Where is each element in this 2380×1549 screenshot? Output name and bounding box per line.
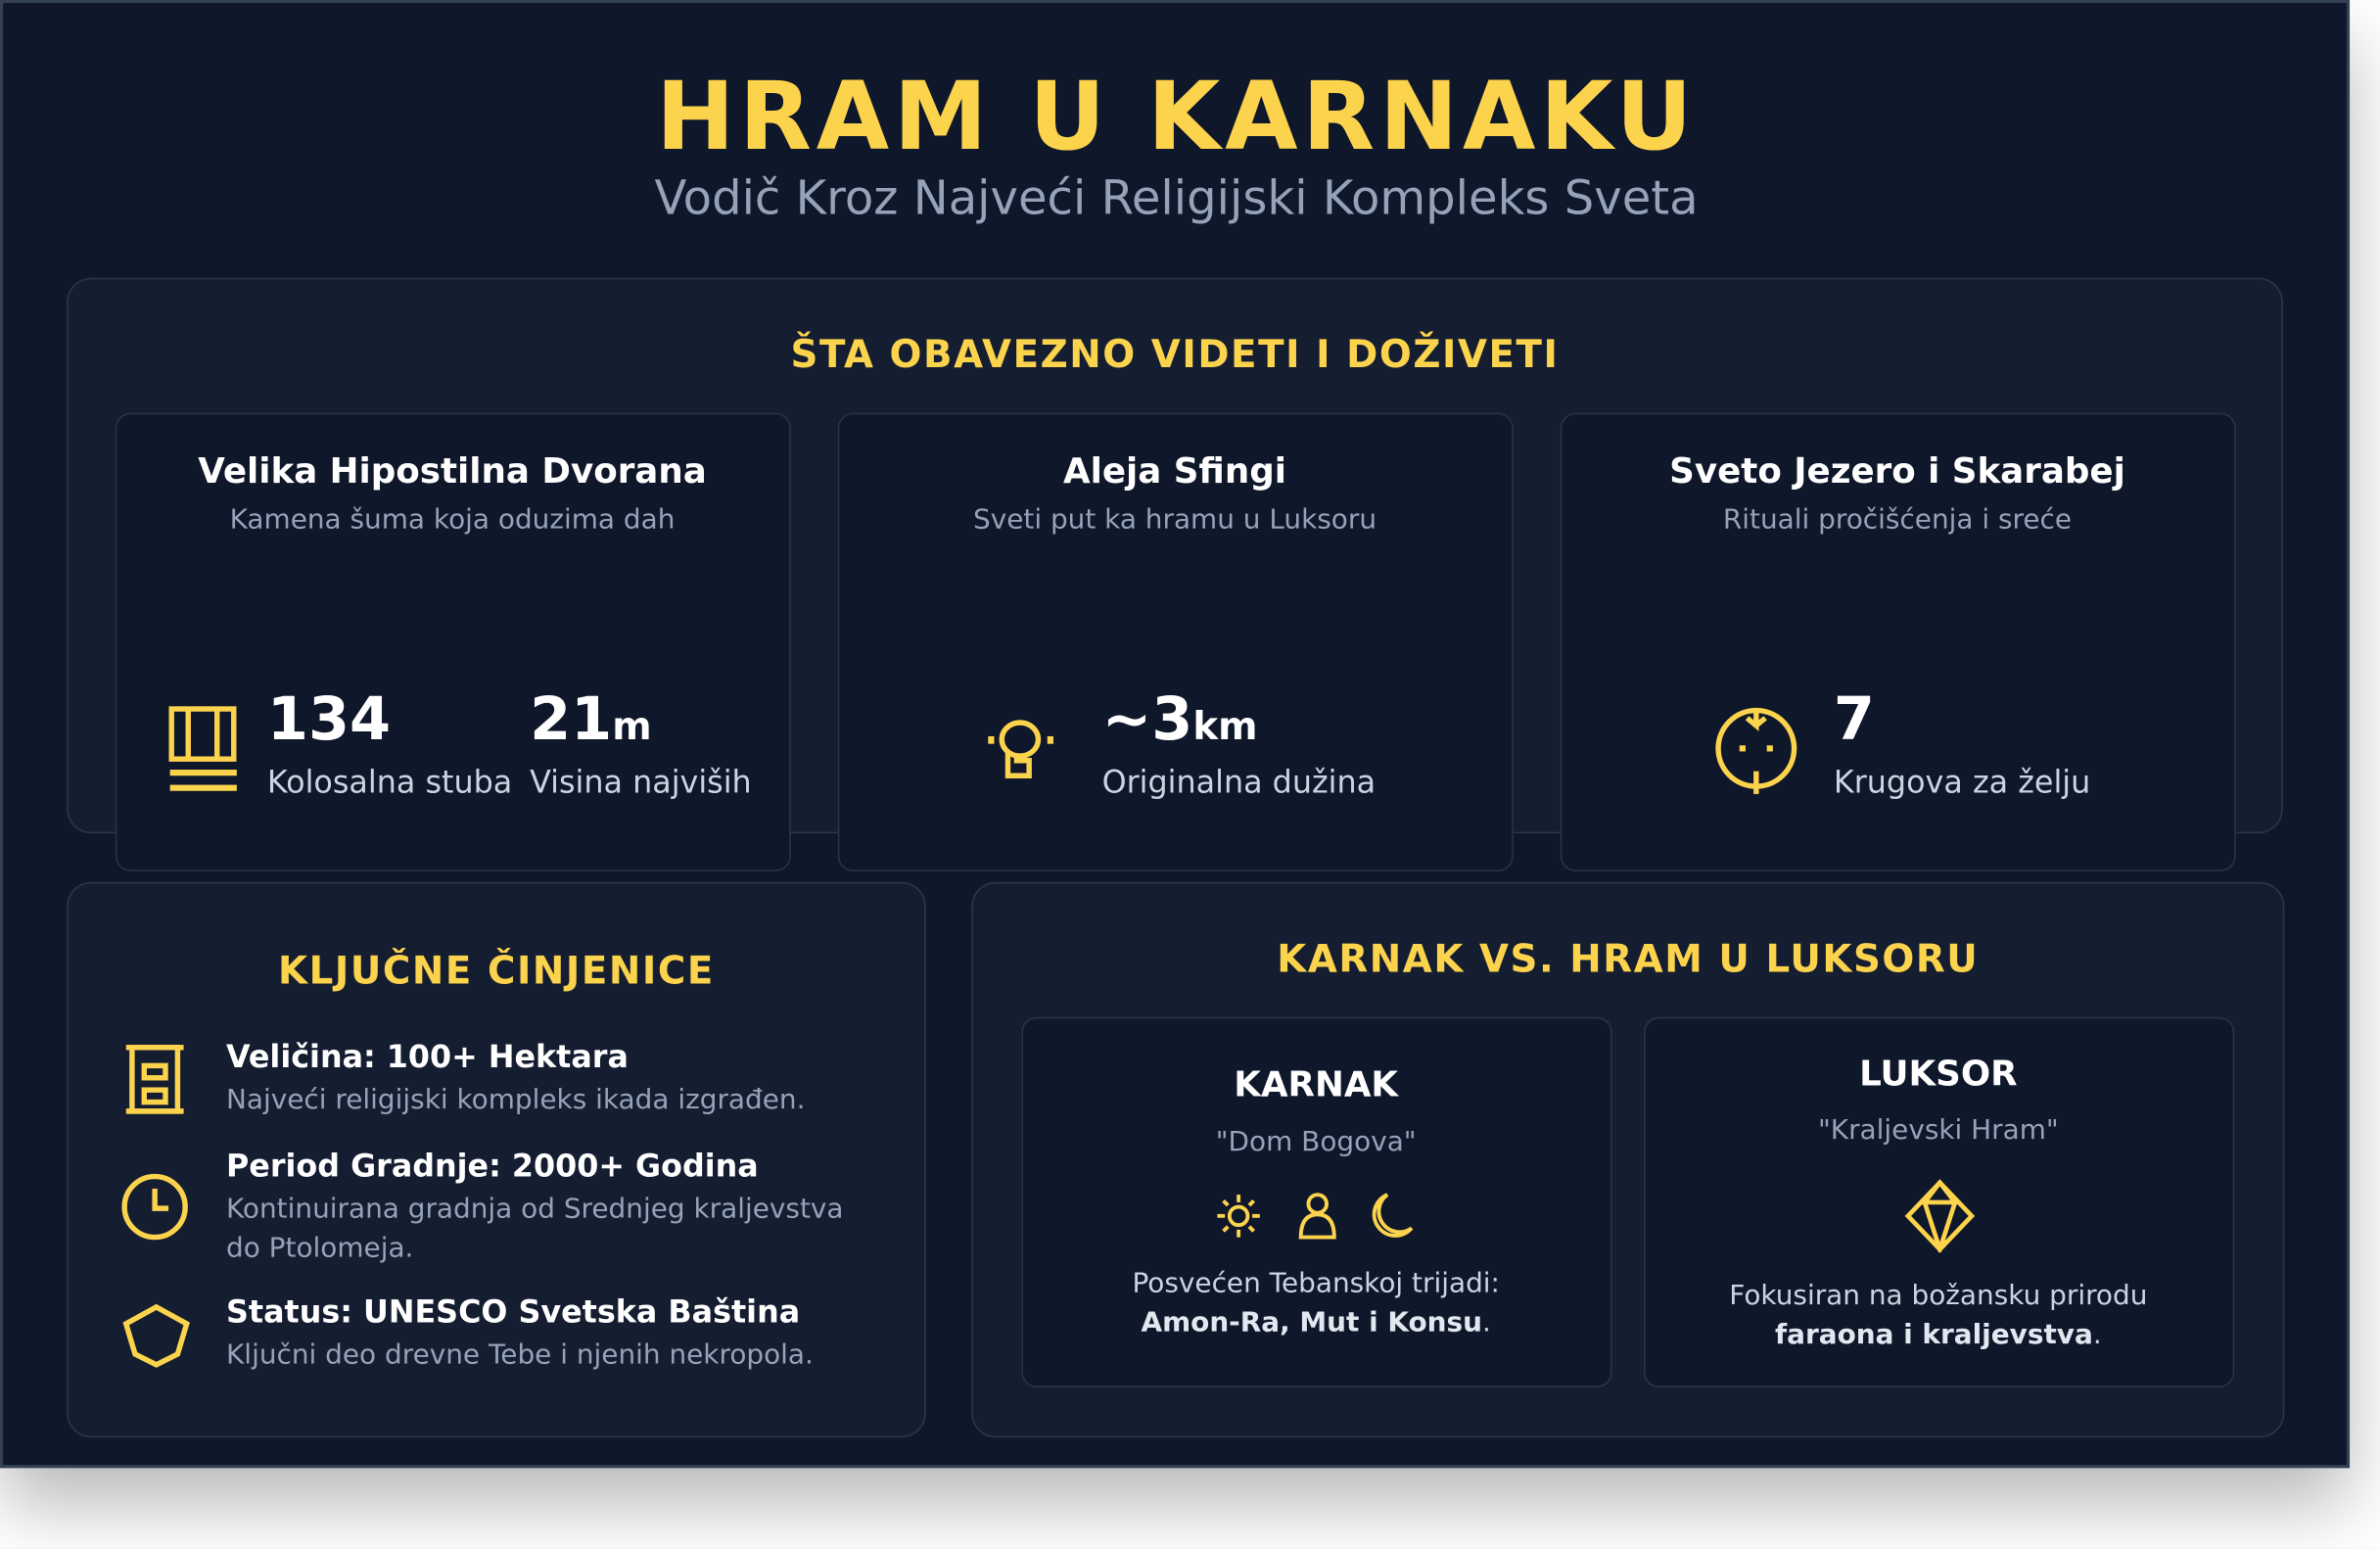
stat: 7 — [1834, 686, 2090, 800]
fact: size — [125, 1038, 805, 1116]
panel: key facts — [67, 882, 926, 1437]
stat: 7: 7 — [1834, 686, 1875, 755]
card: hypostyle hall — [116, 413, 791, 871]
stat: 3km — [1102, 686, 1376, 800]
fact: period — [121, 1148, 844, 1264]
card: luksor: LUKSOR — [1859, 1056, 2018, 1095]
stat: 21m: 21m — [530, 686, 652, 755]
card: karnak — [1021, 1017, 1612, 1387]
icon: hexagon — [123, 1304, 190, 1368]
card: sacred lake — [1561, 413, 2236, 871]
icon: diamond — [1905, 1179, 1976, 1253]
card: karnak: "Dom Bogova" — [1216, 1126, 1417, 1158]
subtitle: Vodič Kroz Najveći Religijski Kompleks Sveta — [655, 171, 1699, 226]
icon: column — [168, 706, 237, 791]
card subtitle: Sveti put ka hramu u Luksoru — [973, 504, 1377, 536]
card title: Velika Hipostilna Dvorana — [198, 452, 707, 492]
icon: scarab — [1715, 707, 1797, 794]
heading: must see: ŠTA OBAVEZNO VIDETI I DOŽIVETI — [790, 333, 1560, 376]
stat: 3km: ~3km — [1102, 686, 1258, 755]
fact: status — [123, 1293, 814, 1371]
stat: 134: 134 — [267, 686, 391, 755]
fact: status: Status: UNESCO Svetska Baština — [226, 1293, 800, 1330]
icon: clock — [121, 1173, 188, 1240]
fact: period: Period Gradnje: 2000+ Godina — [226, 1148, 759, 1184]
heading: key facts: KLJUČNE ČINJENICE — [278, 949, 715, 993]
heading: comparison: KARNAK VS. HRAM U LUKSORU — [1277, 937, 1979, 981]
stat: 21m — [530, 686, 752, 800]
card: karnak: Posvećen Tebanskoj trijadi: — [1132, 1268, 1500, 1299]
card: luksor: faraona i kraljevstva. — [1775, 1319, 2102, 1351]
card title: Sveto Jezero i Skarabej — [1669, 452, 2125, 492]
card subtitle: Kamena šuma koja oduzima dah — [230, 504, 675, 536]
stat: 134: Kolosalna stuba — [267, 764, 512, 800]
card: luksor: Fokusiran na božansku prirodu — [1729, 1280, 2147, 1312]
panel: comparison — [971, 882, 2284, 1437]
title: HRAM U KARNAKU — [656, 61, 1697, 171]
fact: size: Veličina: 100+ Hektara — [226, 1038, 629, 1075]
card title: Aleja Sfingi — [1063, 452, 1286, 492]
icons: trinity — [1217, 1193, 1414, 1240]
stat: 7: Krugova za želju — [1834, 764, 2090, 800]
stat: 21m: Visina najviših — [530, 764, 752, 800]
card subtitle: Rituali pročišćenja i sreće — [1723, 504, 2072, 536]
card: luksor — [1644, 1017, 2234, 1387]
fact: status: Ključni deo drevne Tebe i njenih nekropola. — [226, 1338, 814, 1371]
fact: period: Kontinuirana gradnja od Srednjeg kraljevstva do Ptolomeja. — [226, 1194, 844, 1264]
card: avenue of sphinxes — [838, 413, 1514, 871]
icon: sphinx head — [988, 720, 1053, 778]
stat: 3km: Originalna dužina — [1102, 764, 1376, 800]
icon: building — [125, 1045, 184, 1114]
stat: 134 — [267, 686, 512, 800]
card: luksor: "Kraljevski Hram" — [1818, 1114, 2059, 1147]
fact: size: Najveći religijski kompleks ikada izgrađen. — [226, 1084, 805, 1116]
card: karnak: Amon-Ra, Mut i Konsu. — [1141, 1307, 1491, 1338]
card: karnak: KARNAK — [1234, 1065, 1398, 1105]
panel: must see — [67, 278, 2283, 833]
